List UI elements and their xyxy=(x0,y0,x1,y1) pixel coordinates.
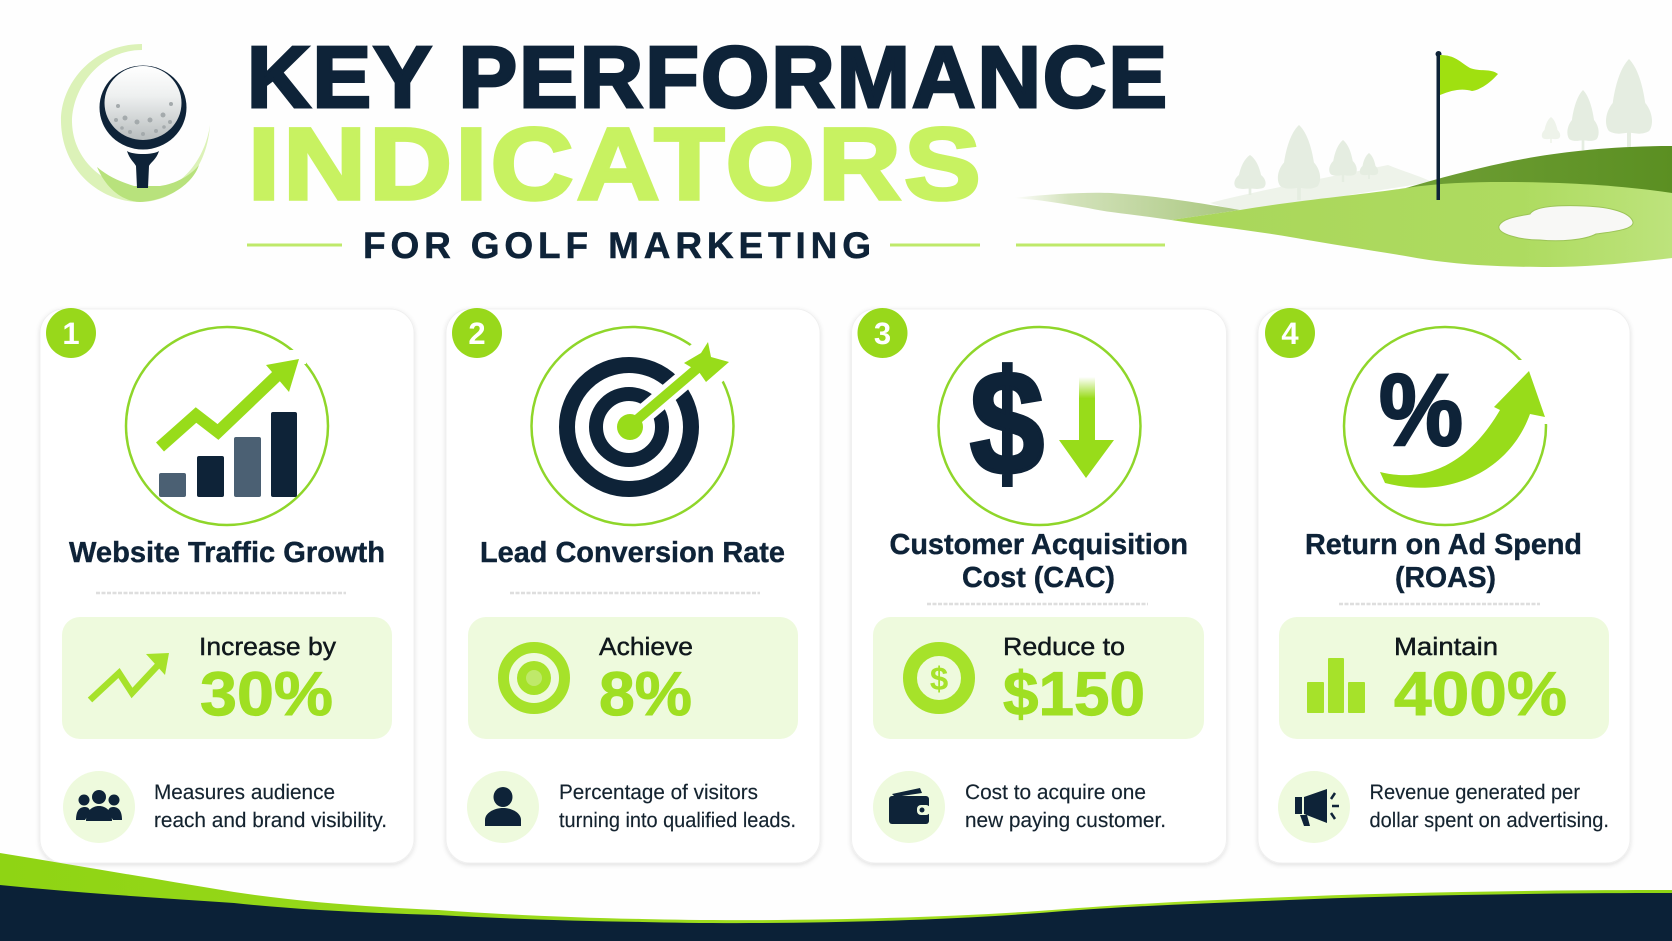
icon: golf ball on tee xyxy=(61,44,210,202)
target panel: Achieve xyxy=(599,633,693,661)
card 4: return on ad spend xyxy=(1258,308,1630,863)
card panel xyxy=(852,309,1226,863)
number badge: 4 xyxy=(1281,316,1299,351)
title xyxy=(247,29,1169,266)
description: Cost to acquire one xyxy=(965,781,1146,804)
heading: Customer Acquisition xyxy=(890,529,1188,561)
number badge: 2 xyxy=(468,316,486,351)
number badge xyxy=(46,308,96,358)
description: Measures audience xyxy=(154,781,335,804)
icon: megaphone xyxy=(1295,789,1339,826)
number badge xyxy=(452,308,502,358)
flag xyxy=(1436,51,1498,200)
heading: Return on Ad Spend xyxy=(1305,529,1582,561)
description xyxy=(467,771,796,843)
card 1: website traffic growth xyxy=(40,308,414,863)
icon: small arrow xyxy=(90,653,169,700)
target panel: Reduce to xyxy=(1003,633,1125,661)
target panel: Increase by xyxy=(199,633,337,661)
icon: percent and rising arrow: % xyxy=(1379,353,1463,467)
green fairway xyxy=(1171,182,1672,267)
target panel: Maintain xyxy=(1394,633,1498,661)
icon: dollar and down arrow xyxy=(938,327,1140,525)
subtitle: FOR GOLF MARKETING xyxy=(363,225,871,266)
icon: wallet xyxy=(889,788,930,824)
heading: Lead Conversion Rate xyxy=(480,537,785,569)
number badge: 1 xyxy=(62,316,80,351)
far fairway xyxy=(1012,193,1240,220)
description: Revenue generated per xyxy=(1370,781,1580,804)
description: turning into qualified leads. xyxy=(559,809,796,832)
description: Percentage of visitors xyxy=(559,781,758,804)
target panel: 8% xyxy=(599,660,692,729)
icon: audience xyxy=(76,790,122,821)
heading: Website Traffic Growth xyxy=(69,537,385,569)
description xyxy=(63,771,387,843)
description xyxy=(873,771,1166,843)
number badge: 3 xyxy=(874,316,891,351)
target panel: 400% xyxy=(1394,660,1567,729)
description: new paying customer. xyxy=(965,809,1166,832)
heading: Cost (CAC) xyxy=(962,562,1115,594)
icon: growth chart xyxy=(126,327,328,525)
heading: key performance: KEY PERFORMANCE xyxy=(247,29,1169,126)
heading xyxy=(890,529,1188,594)
target panel xyxy=(62,617,392,739)
footer wave xyxy=(0,853,1672,941)
target panel: 30% xyxy=(200,660,333,729)
target panel xyxy=(873,617,1204,739)
heading: indicators: INDICATORS xyxy=(248,107,984,221)
icon: small target xyxy=(504,648,564,708)
target panel xyxy=(468,617,798,739)
card panel xyxy=(40,309,414,863)
sand bunker xyxy=(1499,206,1633,241)
heading xyxy=(1305,529,1582,594)
dark hill xyxy=(1406,146,1672,196)
card panel xyxy=(1258,309,1630,863)
icon: percent and rising arrow xyxy=(1344,327,1552,525)
icon: coin: $ xyxy=(930,660,948,697)
number badge xyxy=(858,308,908,358)
icon: coin xyxy=(910,649,968,707)
card 2: lead conversion rate xyxy=(446,308,820,863)
trees xyxy=(1210,59,1652,212)
number badge xyxy=(1265,308,1315,358)
description xyxy=(1278,771,1609,843)
description: reach and brand visibility. xyxy=(154,809,387,832)
target panel: $150 xyxy=(1003,660,1145,729)
target panel xyxy=(1279,617,1609,739)
card panel xyxy=(446,309,820,863)
icon: small bars xyxy=(1307,658,1365,713)
icon: person xyxy=(485,787,521,826)
card 3: customer acquisition cost xyxy=(852,308,1226,863)
golf course landscape xyxy=(1012,51,1672,267)
description: dollar spent on advertising. xyxy=(1370,809,1609,832)
icon: dollar and down arrow: $ xyxy=(970,341,1044,506)
icon: target with dart xyxy=(532,327,734,525)
heading: (ROAS) xyxy=(1395,562,1496,594)
